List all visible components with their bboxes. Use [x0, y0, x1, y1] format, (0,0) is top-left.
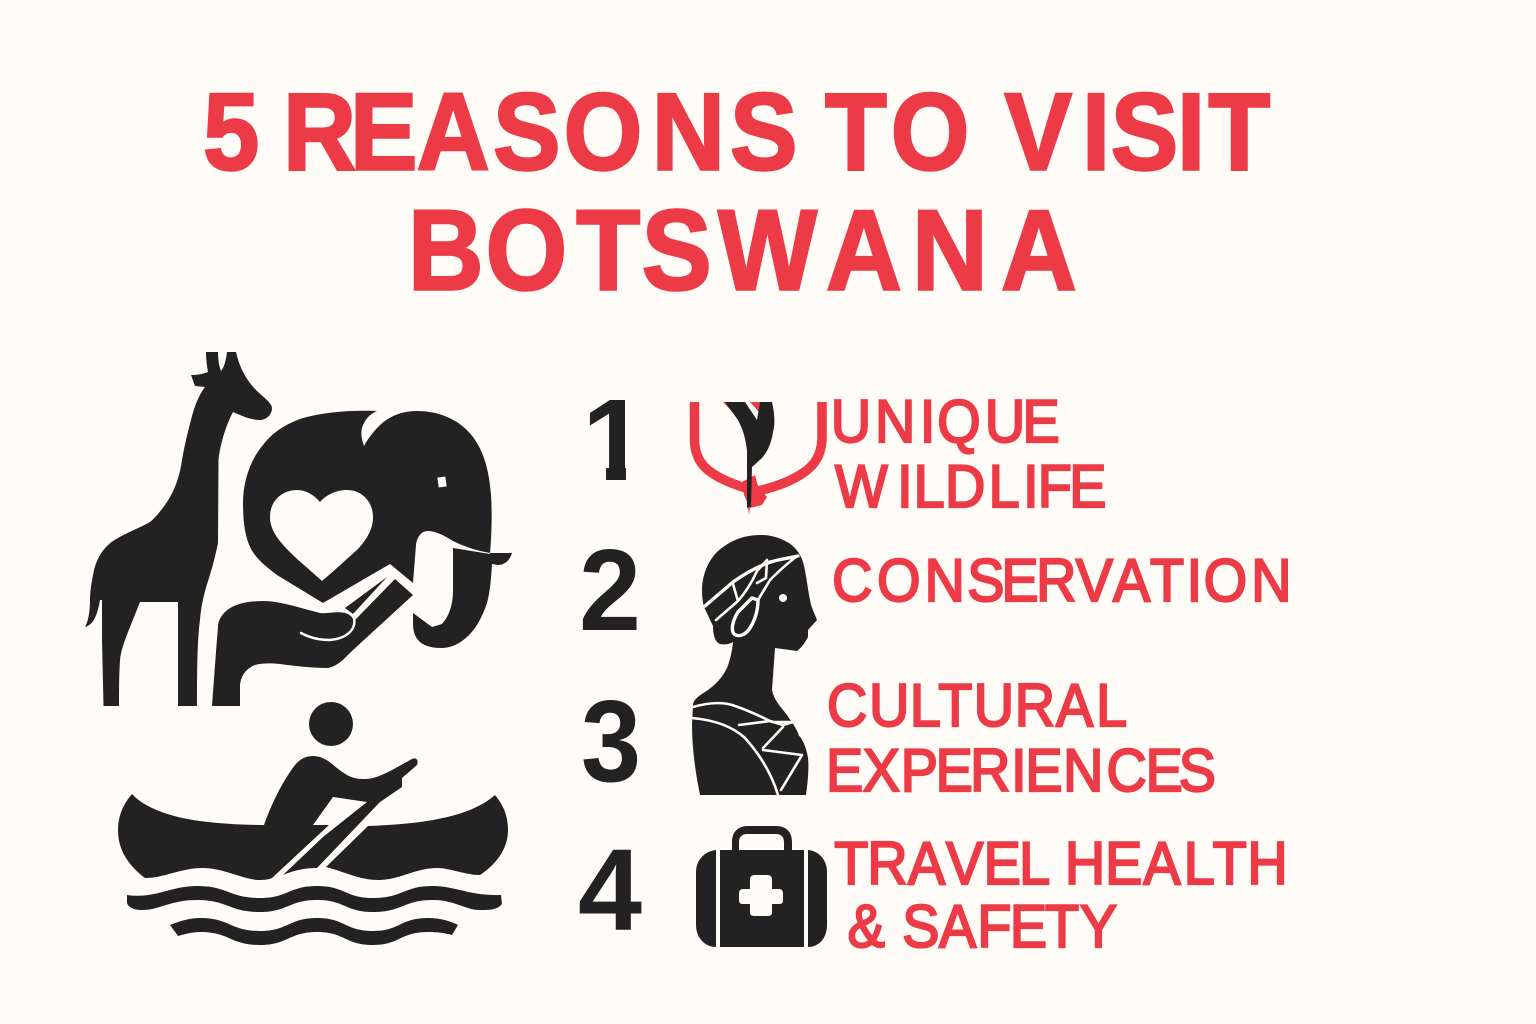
- number 1: 1: [582, 375, 647, 505]
- number 4: 4: [578, 825, 642, 955]
- label: conservation: CONSERVATION: [832, 548, 1292, 614]
- title: BOTSWANA: [408, 188, 1077, 314]
- icon: canoe paddler: [118, 702, 508, 912]
- icon: red wildlife emblem: [694, 402, 822, 515]
- icon: woman profile: [692, 535, 817, 795]
- number 3: 3: [581, 676, 641, 806]
- label: travel health and safety: & SAFETY: [848, 894, 1117, 960]
- elephant eye: [437, 476, 447, 488]
- water waves: [127, 886, 502, 912]
- icon: elephant with heart: [243, 411, 512, 648]
- label: cultural experiences: EXPERIENCES: [826, 738, 1216, 804]
- infographic canvas: [85, 92, 1288, 949]
- title: [203, 71, 1270, 314]
- label: cultural experiences: [826, 673, 1216, 804]
- icon: first aid kit: [696, 826, 827, 947]
- icon: giraffe: [85, 352, 272, 706]
- label: travel health and safety: TRAVEL HEALTH: [834, 831, 1288, 897]
- label: travel health and safety: [834, 831, 1288, 960]
- label: cultural experiences: CULTURAL: [827, 673, 1127, 739]
- label: unique wildlife: UNIQUE: [831, 389, 1060, 455]
- number 2: 2: [579, 525, 641, 655]
- icon: caring hand: [212, 577, 413, 706]
- title: 5 REASONS TO VISIT: [203, 71, 1270, 193]
- label: unique wildlife: [831, 389, 1107, 520]
- water wave lower: [170, 918, 458, 945]
- label: unique wildlife: WILDLIFE: [835, 454, 1107, 520]
